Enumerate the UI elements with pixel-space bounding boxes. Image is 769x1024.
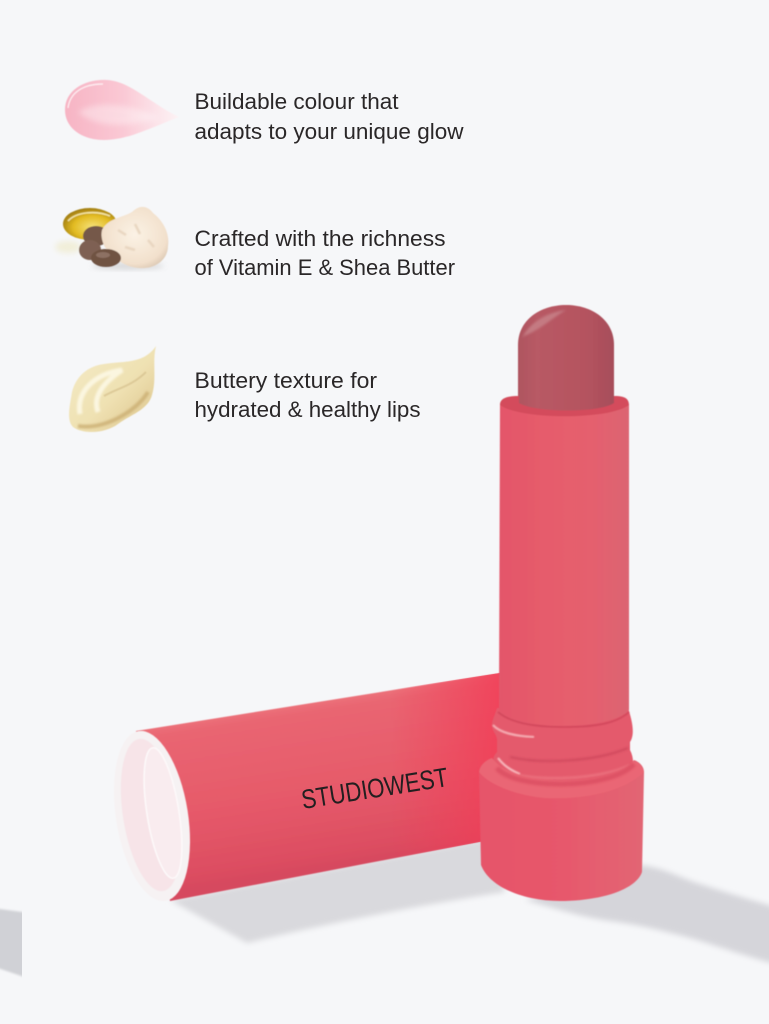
text: buildable colour [194,89,464,144]
icon: pink gloss swatch [65,80,179,140]
base [479,758,644,901]
text: buildable colour: adapts to your unique glow [194,119,464,144]
feature 1: colour [65,80,464,144]
lipstick standing upright [479,305,644,901]
text: buttery texture: Buttery texture for [194,368,377,393]
feature 2: vitamin E and shea butter [55,207,455,280]
text: crafted with: Crafted with the richness [194,226,446,251]
brand logo: STUDIOWEST [299,762,450,815]
tube collar rim [500,396,629,420]
cap opening [103,725,201,907]
feature 3: buttery texture [69,346,421,432]
lipstick bullet [518,305,614,412]
cap body [136,673,500,901]
text: buildable colour: Buildable colour that [194,89,398,114]
text: buttery texture [194,368,420,422]
shadow under cap [170,838,505,943]
neck with rings [492,708,633,786]
left edge shadow fragment [0,908,22,977]
tube body [499,405,629,726]
text: buttery texture: hydrated & healthy lips [194,397,420,422]
cap lying on its side [103,673,500,907]
icon: vitamin capsule, shea nuts and butter [55,207,168,270]
shadow of lipstick base [525,865,769,968]
text: crafted with: of Vitamin E & Shea Butter [194,255,455,280]
icon: cream swatch [69,346,156,432]
text: crafted with [194,226,455,280]
